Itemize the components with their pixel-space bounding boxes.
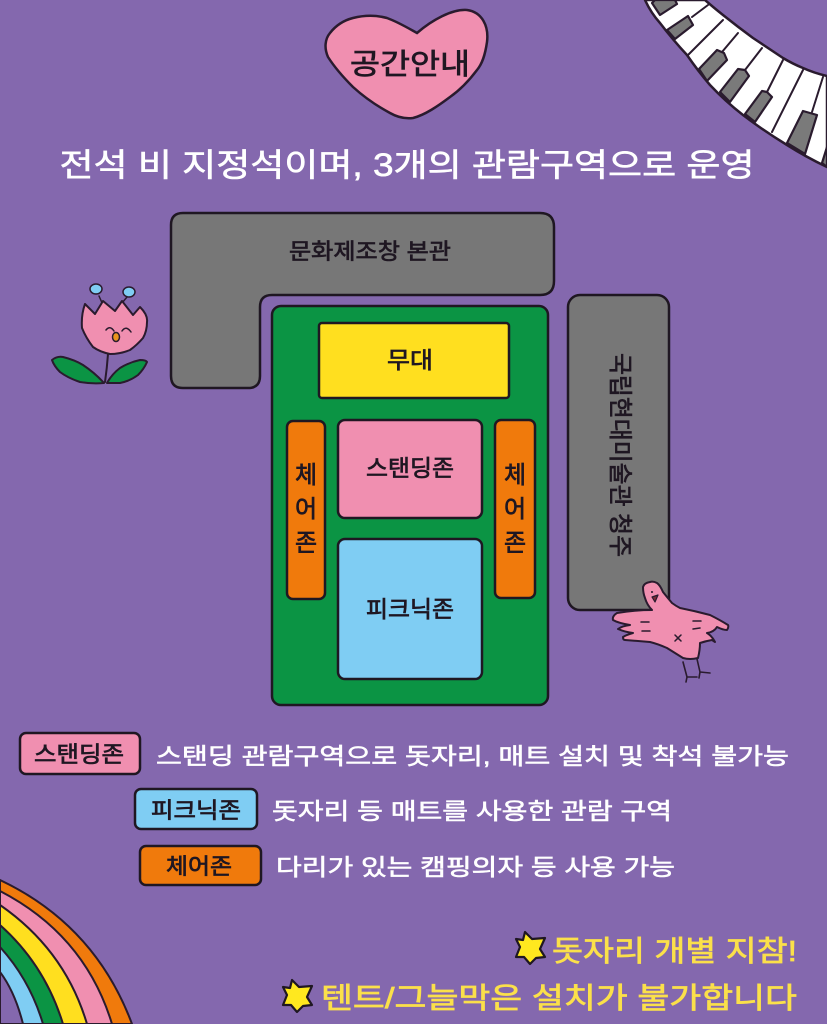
map <box>171 213 669 705</box>
chair zone right: 체 <box>504 462 526 489</box>
chair zone right: 존 <box>504 530 526 557</box>
chair zone left: 존 <box>295 530 317 557</box>
chair zone right <box>495 420 535 598</box>
legend row: chair zone: 체어존 <box>166 854 232 879</box>
icon: pink bird <box>613 582 728 682</box>
legend row: chair zone: 다리가 있는 캠핑의자 등 사용 가능 <box>276 854 675 880</box>
legend row: standing zone: 스탠딩존 <box>34 742 124 767</box>
icon: star <box>516 932 545 964</box>
icon: star <box>283 980 312 1012</box>
icon: rainbow <box>0 880 132 1024</box>
title: 전석 비 지정석이며, 3개의 관람구역으로 운영 <box>60 147 754 183</box>
legend row: picnic zone: 피크닉존 <box>151 798 241 823</box>
legend row: picnic zone <box>135 789 672 829</box>
picnic zone <box>338 539 482 679</box>
icon: piano keyboard <box>645 0 827 167</box>
chair zone left: 어 <box>295 496 317 523</box>
building: main hall <box>171 213 554 388</box>
legend row: picnic zone: 돗자리 등 매트를 사용한 관람 구역 <box>272 798 672 824</box>
legend row: standing zone: 스탠딩 관람구역으로 돗자리, 매트 설치 및 착석 불가능 <box>156 743 789 769</box>
chair zone right: 어 <box>504 496 526 523</box>
notice: mat guidance: 돗자리 개별 지참! <box>552 936 797 968</box>
stage: 무대 <box>387 347 433 373</box>
standing zone <box>338 420 482 518</box>
building: museum: 국립현대미술관 청주 <box>606 353 633 557</box>
legend <box>20 733 789 885</box>
legend row: chair zone <box>140 846 675 885</box>
building: museum <box>568 295 669 610</box>
standing zone: 스탠딩존 <box>366 455 454 481</box>
notice: tents prohibited: 텐트/그늘막은 설치가 불가합니다 <box>321 983 797 1015</box>
venue lawn <box>272 306 548 705</box>
building: main hall: 문화제조창 본관 <box>289 239 451 264</box>
icon: tulip <box>52 284 147 383</box>
stage <box>319 323 509 398</box>
heading: 공간안내: 공간안내 <box>350 49 470 81</box>
chair zone left <box>287 421 325 599</box>
legend row: standing zone <box>20 733 789 774</box>
chair zone left: 체 <box>295 462 317 489</box>
notice: mat guidance <box>516 932 797 968</box>
icon: heart badge <box>326 10 487 118</box>
picnic zone: 피크닉존 <box>366 596 454 622</box>
